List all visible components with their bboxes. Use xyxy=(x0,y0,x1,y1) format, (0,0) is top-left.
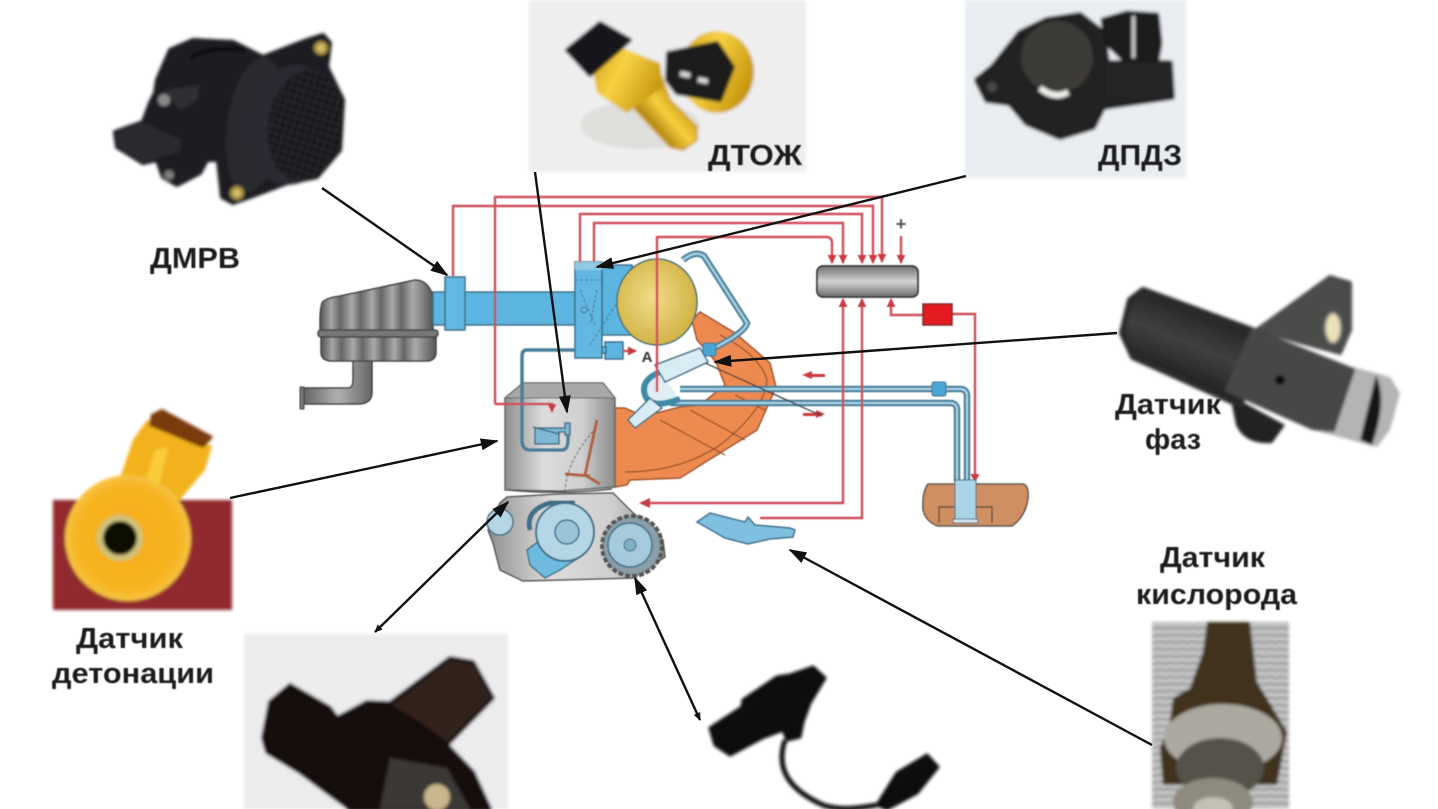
cable connector xyxy=(877,755,938,809)
photo: throttle position sensor xyxy=(965,0,1186,178)
air filter housing xyxy=(300,280,438,409)
label second line: кислорода xyxy=(1136,579,1298,611)
pulley hub xyxy=(555,520,579,544)
label A: A xyxy=(642,349,653,366)
fuel injectors xyxy=(628,348,708,428)
panel: crankshaft sensor photo xyxy=(710,667,938,809)
flywheel hub xyxy=(624,539,636,551)
label ДМРВ: ДМРВ xyxy=(150,243,240,275)
label ДТОЖ: ДТОЖ xyxy=(708,140,803,172)
photo: phase sensor xyxy=(1122,277,1400,447)
panel: oxygen sensor xyxy=(1136,542,1298,809)
arrow: phase sensor xyxy=(715,333,1117,362)
belt guard xyxy=(529,503,575,530)
panel: ДМРВ sensor xyxy=(115,35,351,275)
air mass meter pipe xyxy=(697,513,795,544)
arrow: crankshaft sensor xyxy=(635,578,700,720)
engine cylinder head xyxy=(505,383,615,502)
blue pump body xyxy=(527,540,580,578)
control unit xyxy=(817,266,918,297)
plus terminal: + xyxy=(896,214,906,234)
red signal wiring xyxy=(453,197,975,518)
panel: phase sensor xyxy=(1115,277,1400,456)
panel: engine system diagram xyxy=(300,197,1028,581)
black pointer arrows xyxy=(230,172,1152,745)
label Датчик кислорода: Датчик xyxy=(1160,542,1266,574)
flywheel spokes xyxy=(608,523,652,567)
yellow air chamber xyxy=(617,259,697,345)
photo background xyxy=(244,634,508,809)
panel: camshaft sensor photo xyxy=(244,634,508,809)
label ДПДЗ: ДПДЗ xyxy=(1098,140,1182,172)
sensor cylinder xyxy=(392,660,491,742)
blue regulator box xyxy=(602,342,623,359)
photo: knock sensor xyxy=(53,410,232,610)
mounting hole xyxy=(424,784,450,809)
label second line: детонации xyxy=(52,658,214,690)
label second line: фаз xyxy=(1145,424,1201,456)
red flow arrows xyxy=(623,351,825,508)
orange intake manifold xyxy=(615,312,776,487)
arrow: camshaft sensor xyxy=(375,502,508,632)
throttle body xyxy=(575,262,632,358)
air duct xyxy=(433,277,575,330)
fuel tank xyxy=(923,480,1028,526)
red relay xyxy=(923,304,952,325)
vacuum hose xyxy=(522,350,575,450)
arrow: knock sensor xyxy=(230,441,497,498)
arrow: ДТОЖ xyxy=(535,172,567,412)
pump pulley xyxy=(536,503,594,561)
mounting plate xyxy=(380,758,470,809)
sensor silhouette xyxy=(263,658,493,809)
label Датчик фаз: Датчик xyxy=(1115,389,1222,421)
engine lower block xyxy=(487,493,665,581)
photo: oxygen sensor xyxy=(1152,622,1289,809)
panel: ДТОЖ sensor xyxy=(529,0,806,172)
sensor cable xyxy=(782,740,877,808)
photo: mass air flow sensor xyxy=(115,35,351,203)
panel: knock sensor xyxy=(52,410,232,690)
fuel lines xyxy=(670,254,967,482)
sensor body xyxy=(710,667,825,755)
small pulley xyxy=(487,509,513,535)
arrow: ДМРВ xyxy=(322,188,447,275)
arrow: oxygen sensor xyxy=(790,550,1152,745)
thin sensor line xyxy=(705,363,822,416)
photo: coolant temperature sensor xyxy=(529,0,806,172)
arrow: ДПДЗ xyxy=(597,176,966,267)
panel: ДПДЗ sensor xyxy=(965,0,1186,178)
flywheel xyxy=(602,516,662,576)
label Датчик детонации: Датчик xyxy=(76,623,184,655)
idle valve cluster xyxy=(533,423,570,444)
